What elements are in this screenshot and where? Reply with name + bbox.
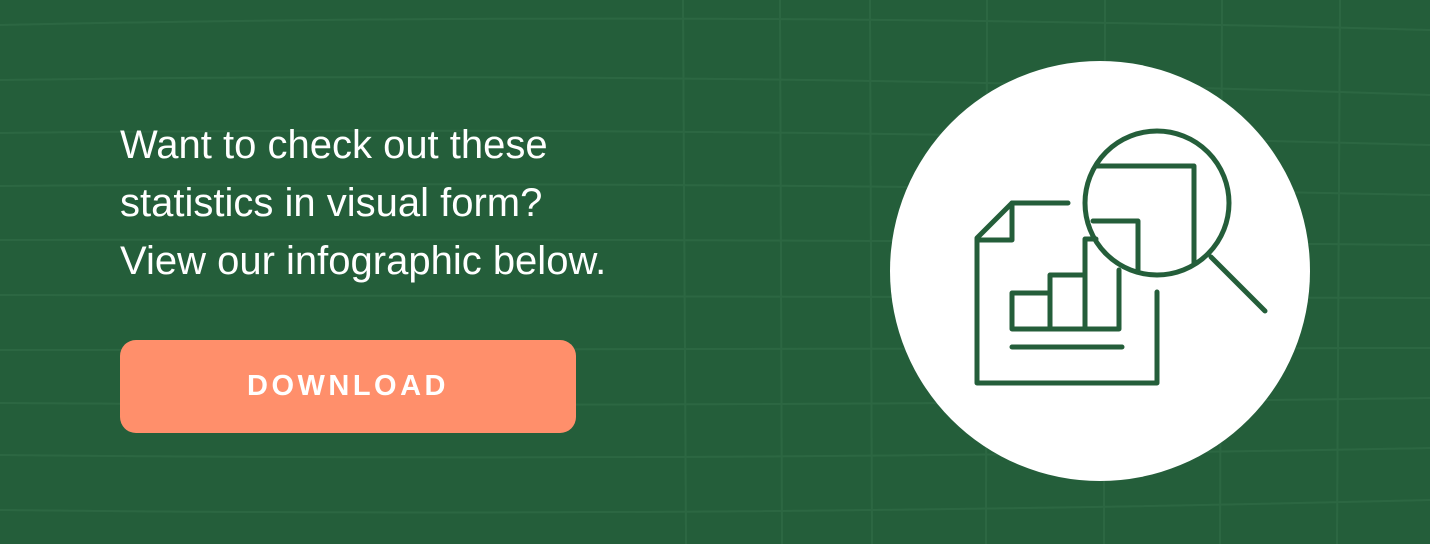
text block: heading: statistics in visual form?	[120, 181, 542, 225]
text block: heading: View our infographic below.	[120, 239, 606, 283]
text block: heading: Want to check out these	[120, 123, 548, 167]
button: download: DOWNLOAD	[247, 370, 449, 402]
button: download	[120, 340, 576, 433]
text block: heading	[120, 123, 606, 283]
